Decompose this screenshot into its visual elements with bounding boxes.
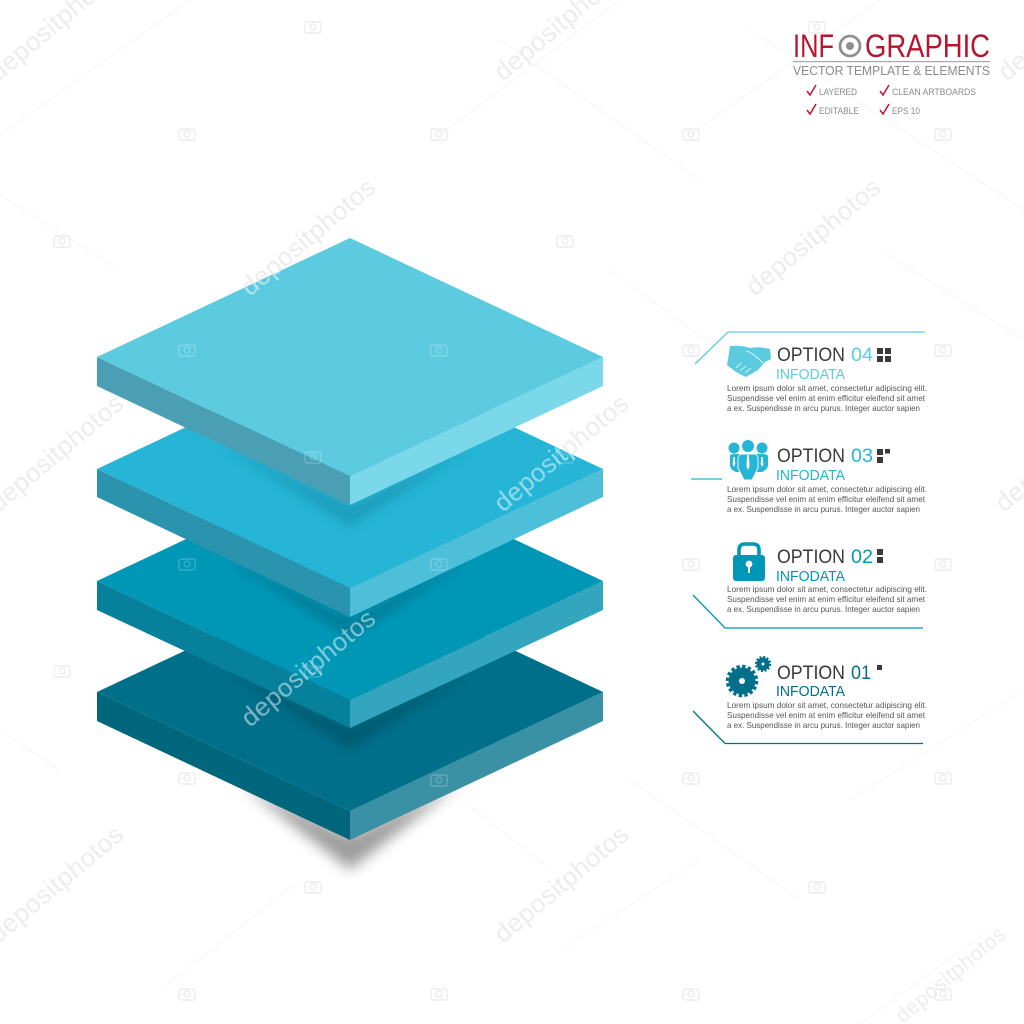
option 03 block [691,440,927,514]
watermark pattern: depositphotos [488,388,634,518]
level squares [877,549,883,563]
option 04 block: INFODATA [776,366,845,383]
level square [877,665,882,670]
description: Lorem ipsum dolor sit amet, consectetur adipiscing elit. [727,383,927,393]
option 02 block: 02 [851,547,873,568]
description: Suspendisse vel enim at enim efficitur eleifend sit amet [727,494,926,504]
description [727,383,927,413]
watermark pattern: depositphotos [235,172,381,302]
option 01 block: 01 [851,663,871,684]
header logo: LAYERED [819,87,857,97]
slab 2 [97,413,603,617]
icon: padlock [733,544,765,581]
icon: gears [728,657,770,696]
option 02 block [693,544,927,628]
option 02 block: OPTION [777,547,845,568]
watermark pattern: depositphotos [740,172,886,302]
description: a ex. Suspendisse in arcu purus. Integer auctor sapien [727,720,920,730]
watermark pattern: depositphotos [488,819,634,949]
header logo: EDITABLE [819,106,859,116]
description [727,484,927,514]
option 04 block [695,332,927,413]
description: a ex. Suspendisse in arcu purus. Integer auctor sapien [727,403,920,413]
description: Suspendisse vel enim at enim efficitur eleifend sit amet [727,710,926,720]
description [727,700,927,730]
header logo: EPS 10 [892,106,920,116]
watermark pattern: depositphotos [488,388,634,518]
option 04 block: OPTION [777,345,845,366]
description: Suspendisse vel enim at enim efficitur eleifend sit amet [727,594,926,604]
option 02 block: INFODATA [776,568,845,585]
watermark pattern: depositphotos [235,172,381,302]
option 03 block: 03 [851,446,873,467]
icon: target letter O [840,36,860,56]
description: Lorem ipsum dolor sit amet, consectetur adipiscing elit. [727,584,927,594]
watermark pattern: depositphotos [235,603,381,733]
level squares [877,348,891,362]
option 03 block: OPTION [777,446,845,467]
option 01 block: OPTION [777,663,845,684]
option 01 block [693,657,927,744]
option 04 block: 04 [851,345,873,366]
header logo: CLEAN ARTBOARDS [892,87,976,97]
level squares [877,449,890,463]
slab 3 [97,525,603,728]
option 03 block: INFODATA [776,467,845,484]
header logo: INF [793,28,834,64]
description: a ex. Suspendisse in arcu purus. Integer auctor sapien [727,504,920,514]
slab 4 (bottom layer) [97,636,603,876]
description [727,584,927,614]
header logo [793,28,990,116]
description: a ex. Suspendisse in arcu purus. Integer auctor sapien [727,604,920,614]
icon: team [728,440,768,480]
description: Lorem ipsum dolor sit amet, consectetur adipiscing elit. [727,700,927,710]
header logo: VECTOR TEMPLATE & ELEMENTS [793,64,990,78]
option 01 block: INFODATA [776,683,845,700]
description: Suspendisse vel enim at enim efficitur eleifend sit amet [727,393,926,403]
description: Lorem ipsum dolor sit amet, consectetur adipiscing elit. [727,484,927,494]
icon: handshake [727,346,771,377]
header logo: GRAPHIC [865,28,990,64]
slab 1 (top layer) [97,238,603,505]
